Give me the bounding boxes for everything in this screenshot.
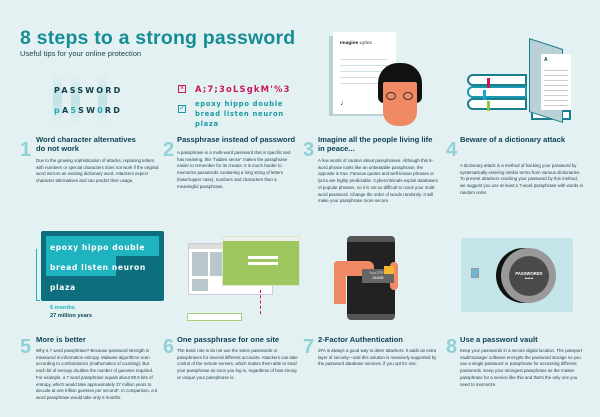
step 6: The basic rule is do not use the same passwords or passphrases for several different accounts. Attackers can take control of the remote servers, which makes them able to steal your passphrase as soon you log in, regardless of how strong or unique your passphrase is. bbox=[177, 348, 298, 380]
step 5: Why a 7 word passphrase? Because password strength is measured in information entropy. Malware algorithms scan according to combinatorics (mathematics of counting). But each bit of entropy doubles the number of guesses required. For example, a 7 word passphrase equals about 90.5 bits of entropy, which would take approximately 27 million years to decode at one trillion guesses per second*. In comparison, a 5 word passphrase would take only 6 months. bbox=[36, 348, 157, 400]
illustration: entropy box: epoxy hippo double bbox=[50, 243, 145, 252]
step 8: Use a password vault bbox=[460, 335, 538, 344]
illustration: password substitution: PASSWORD bbox=[54, 86, 123, 95]
step 1: Due to the growing sophistication of attacks, replacing letters with numbers or special characters does not work if the original word mirrors an existing dictionary word. Attackers expect character alternatives and can predict their usage. bbox=[36, 158, 159, 183]
illustration: password vault bbox=[461, 238, 573, 312]
step 6: One passphrase for one site bbox=[177, 335, 279, 344]
illustration: books bbox=[467, 38, 571, 123]
step 6 bbox=[163, 335, 298, 380]
step 8: Keep your passwords in a secure digital location. The passport vault/manager software encrypts the password storage so you use a single password or passphrase for accessing different passwords. Keep your strongest passphrase as the master passphrase for a service like this and that's the only one you need to memorize. bbox=[460, 348, 582, 387]
illustration: bad vs good password: plaza bbox=[195, 120, 219, 128]
step 3: Imagine all the people living life bbox=[318, 135, 432, 144]
step 8 bbox=[446, 335, 582, 387]
illustration: phone OTP bbox=[334, 236, 398, 320]
illustration: entropy box: bread listen neuron bbox=[50, 263, 146, 272]
illustration: bad vs good password: epoxy hippo double bbox=[195, 100, 283, 108]
step 4: A dictionary attack is a method of hacking your password by systematically entering similar terms from various dictionaries. To prevent attackers cracking your password by this method, we suggest you use at least a 7-word passphrase with words in random order. bbox=[460, 163, 583, 195]
step 4: 4 bbox=[446, 139, 457, 161]
step 3: in peace... bbox=[318, 144, 355, 153]
step 7: 2-Factor Authentication bbox=[318, 335, 403, 344]
step 5: More is better bbox=[36, 335, 86, 344]
step 7 bbox=[303, 335, 436, 366]
step 2: 2 bbox=[163, 139, 174, 161]
step 1: do not work bbox=[36, 144, 79, 153]
step 2 bbox=[163, 135, 295, 189]
illustration: entropy box: plaza bbox=[50, 283, 76, 292]
step 2: Passphrase instead of password bbox=[177, 135, 295, 144]
illustration: password substitution: pA5SW0RD bbox=[54, 106, 122, 115]
illustration: entropy box: 6 months bbox=[50, 305, 75, 311]
illustration: lyrics and face: Imagine Lyrics bbox=[340, 41, 372, 46]
illustration: phone OTP: Your OTP is bbox=[369, 271, 387, 275]
illustration: bad vs good password: A;7;3oLSgkM'%3 bbox=[195, 84, 291, 94]
illustration: lyrics and face bbox=[329, 32, 422, 126]
step 6: 6 bbox=[163, 336, 174, 358]
step 1 bbox=[20, 135, 159, 183]
illustration: entropy box bbox=[36, 231, 164, 319]
step 3: A few words of caution about passphrases. Although this 8-word phrase looks like an unbeatable passphrase, the opposite is true. Famous quotes and well-known phrases or lyrics are highly predictable. Cybercriminals exploit databases of popular phrases, so it is not so difficult to crack your multi-word password. Change the order of words randomly. It will make your passphrase more secure. bbox=[318, 158, 438, 203]
step 7: 7 bbox=[303, 336, 314, 358]
illustration: bad vs good password: bread listen neuron bbox=[195, 110, 284, 118]
illustration: lyrics and face: ♩ bbox=[340, 98, 348, 107]
illustration: bad vs good password: ✓ bbox=[179, 105, 185, 112]
step 1: Word character alternatives bbox=[36, 135, 136, 144]
illustration: phone OTP: 264956 bbox=[372, 276, 384, 280]
title: 8 steps to a strong password bbox=[20, 27, 295, 49]
step 2: A passphrase is a multi-word password that is specific and has meaning, this "hidden sense" makes the passphrase easier to remember for its creator. It is much harder to memorize passwords containing a long string of letters (lower/upper case), numbers and characters than a meaningful passphrase. bbox=[177, 150, 290, 189]
illustration: bad vs good password: × bbox=[180, 85, 184, 92]
illustration: browsers bbox=[187, 236, 300, 321]
illustration: entropy box: 27 million years bbox=[50, 313, 92, 319]
step 4: Beware of a dictionary attack bbox=[460, 135, 565, 144]
step 3 bbox=[303, 135, 438, 203]
step 7: 2FA is always a good way to deter attackers. It adds an extra layer of security—and this solution is massively supported by the password database services, if you opt for one. bbox=[318, 348, 436, 366]
illustration: password substitution bbox=[53, 80, 123, 118]
step 4 bbox=[446, 135, 583, 195]
step 8: 8 bbox=[446, 336, 457, 358]
subtitle: Useful tips for your online protection bbox=[20, 49, 141, 58]
step 5: 5 bbox=[20, 336, 31, 358]
illustration: password vault: PASSWORDS bbox=[515, 271, 543, 276]
illustration: bad vs good password bbox=[178, 84, 291, 128]
illustration: books: A bbox=[544, 57, 548, 63]
step 3: 3 bbox=[303, 139, 314, 161]
step 1: 1 bbox=[20, 139, 31, 161]
illustration: password vault: •••••• bbox=[525, 276, 533, 281]
